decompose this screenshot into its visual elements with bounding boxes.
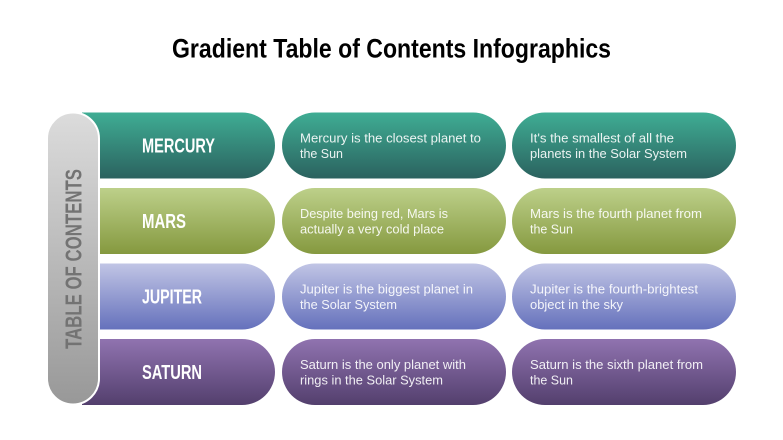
description pill: Jupiter second fact <box>512 264 736 330</box>
description pill: Mars second fact <box>512 188 736 254</box>
description pill: Jupiter second fact: Jupiter is the fourth-brightest <box>530 282 698 296</box>
row: Mars <box>82 188 736 254</box>
description pill: Mercury first fact <box>282 112 506 178</box>
description pill: Mercury second fact: planets in the Solar System <box>530 146 687 161</box>
description pill: Mercury second fact: It's the smallest of all the <box>530 130 674 146</box>
description pill: Jupiter first fact: Jupiter is the biggest planet in <box>300 282 473 296</box>
label pill: Jupiter: JUPITER <box>142 287 202 309</box>
description pill: Saturn second fact: Saturn is the sixth planet from <box>530 357 703 372</box>
description pill: Jupiter first fact <box>282 264 506 330</box>
label pill: Saturn: SATURN <box>142 362 202 384</box>
description pill: Saturn first fact: Saturn is the only planet with <box>300 357 466 372</box>
side panel: table of contents <box>47 112 99 404</box>
label pill: Mercury: MERCURY <box>142 136 215 158</box>
description pill: Mars second fact: Mars is the fourth planet from <box>530 206 702 221</box>
description pill: Mercury first fact: Mercury is the closest planet to <box>300 130 481 146</box>
label pill: Mercury <box>82 112 275 178</box>
row: Jupiter <box>82 264 736 330</box>
description pill: Mars first fact: actually a very cold place <box>300 222 444 236</box>
description pill: Mercury first fact: the Sun <box>300 146 343 161</box>
description pill: Mars first fact: Despite being red, Mars is <box>300 206 448 221</box>
description pill: Saturn second fact: the Sun <box>530 372 573 388</box>
label pill: Saturn <box>82 339 275 405</box>
description pill: Saturn first fact: rings in the Solar System <box>300 372 443 388</box>
description pill: Mars second fact: the Sun <box>530 222 573 236</box>
description pill: Mars first fact <box>282 188 506 254</box>
description pill: Jupiter first fact: the Solar System <box>300 297 397 312</box>
description pill: Saturn first fact <box>282 339 506 405</box>
label pill: Mars: MARS <box>142 211 186 233</box>
side panel heading: TABLE OF CONTENTS <box>60 169 86 349</box>
description pill: Mercury second fact <box>512 112 736 178</box>
title: Gradient Table of Contents Infographics <box>172 34 611 64</box>
description pill: Saturn second fact <box>512 339 736 405</box>
row: Saturn <box>82 339 736 405</box>
description pill: Jupiter second fact: object in the sky <box>530 297 623 312</box>
row: Mercury <box>82 112 736 178</box>
label pill: Mars <box>82 188 275 254</box>
label pill: Jupiter <box>82 264 275 330</box>
